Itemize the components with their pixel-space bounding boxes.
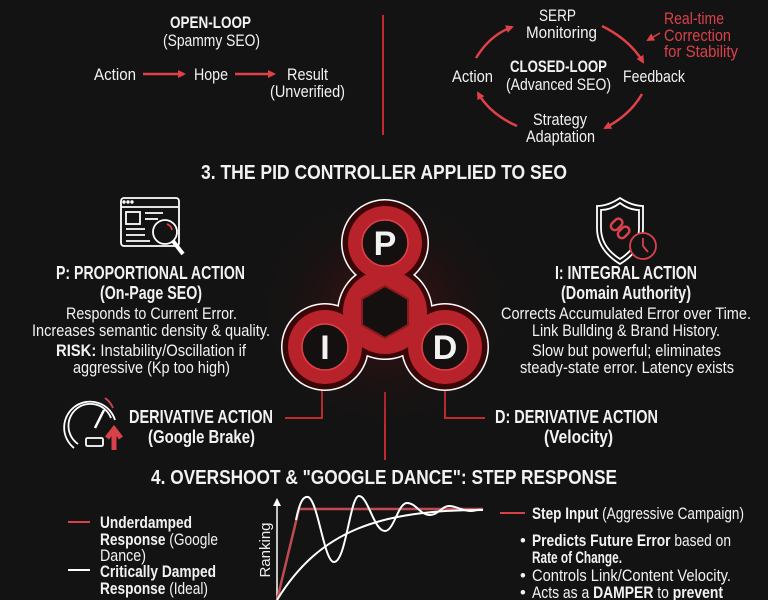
text block: P proportional: Increases semantic density & quality. (32, 322, 270, 340)
panel: open-loop: (Spammy SEO) (163, 32, 260, 50)
text: derivative google brake (129, 407, 273, 447)
text: derivative google brake: (Google Brake) (148, 427, 255, 447)
text block: I integral: Link Bullding & Brand History. (532, 322, 720, 340)
panel: closed-loop: (Advanced SEO) (506, 76, 611, 94)
callout: real-time: Real-time (664, 10, 724, 28)
icon: browser magnifier (121, 198, 183, 254)
legend right + bullets (500, 505, 744, 600)
spinner: PID: D (433, 329, 457, 367)
text block: I integral: (Domain Authority) (561, 283, 691, 303)
legend right + bullets: Predicts Future Error based on (532, 532, 731, 550)
panel: closed-loop: Feedback (623, 68, 686, 86)
open-loop flow: Hope (194, 66, 228, 84)
text block: I integral: Slow but powerful; eliminates (532, 342, 721, 360)
text: D derivative velocity: (Velocity) (544, 427, 613, 447)
spinner: PID: I (320, 329, 330, 367)
text block: I integral: I: INTEGRAL ACTION (555, 263, 697, 283)
panel: closed-loop: Monitoring (526, 24, 597, 42)
text block: P proportional: (On-Page SEO) (100, 283, 202, 303)
icon: shield link clock (597, 198, 656, 264)
spinner: PID (255, 190, 515, 430)
text block: P proportional: P: PROPORTIONAL ACTION (56, 263, 245, 283)
panel: open-loop (94, 14, 345, 101)
text: derivative google brake: DERIVATIVE ACTION (129, 407, 273, 427)
heading 4: 4. OVERSHOOT & "GOOGLE DANCE": STEP RESPONSE (151, 467, 617, 489)
text block: I integral (501, 263, 751, 377)
legend right + bullets: Controls Link/Content Velocity. (532, 567, 731, 585)
legend left: Underdamped (100, 514, 192, 532)
loop arrows (476, 26, 660, 128)
callout: real-time (664, 10, 739, 61)
callout: real-time: for Stability (664, 43, 739, 61)
panel: closed-loop: CLOSED-LOOP (510, 58, 607, 76)
chart: step response (257, 496, 483, 600)
open-loop flow: Action (94, 66, 136, 84)
letters: P (374, 225, 396, 263)
icon: speedometer (64, 398, 121, 450)
text block: P proportional: RISK: Instability/Oscillation if (56, 342, 246, 360)
chart: step response: Ranking (257, 522, 274, 578)
text block: P proportional (32, 263, 270, 377)
text: D derivative velocity (495, 407, 658, 447)
text block: P proportional: aggressive (Kp too high) (73, 359, 230, 377)
panel: closed-loop: Action (452, 68, 493, 86)
legend left (68, 514, 218, 598)
legend left: Response (Google (100, 531, 218, 549)
panel: closed-loop: Strategy (533, 111, 588, 129)
text: D derivative velocity: D: DERIVATIVE ACTION (495, 407, 658, 427)
text block: I integral: steady-state error. Latency exists (520, 359, 734, 377)
callout: real-time: Correction (664, 27, 731, 45)
legend left: Critically Damped (100, 563, 216, 581)
connector lines (285, 385, 485, 460)
panel: closed-loop (452, 7, 739, 146)
text block: P proportional: Responds to Current Error. (66, 305, 237, 323)
legend right + bullets: Rate of Change. (532, 549, 622, 567)
panel: closed-loop: SERP (539, 7, 576, 25)
legend right + bullets: • (520, 567, 526, 585)
panel: closed-loop: Adaptation (526, 128, 595, 146)
legend right + bullets: • (520, 532, 526, 550)
open-loop flow (94, 66, 345, 101)
open-loop flow: (Unverified) (270, 83, 345, 101)
legend left: Response (Ideal) (100, 580, 208, 598)
legend left: Dance) (100, 547, 146, 565)
heading 3: 3. THE PID CONTROLLER APPLIED TO SEO (201, 162, 567, 184)
open-loop title: OPEN-LOOP (170, 14, 251, 32)
open-loop flow: Result (287, 66, 328, 84)
